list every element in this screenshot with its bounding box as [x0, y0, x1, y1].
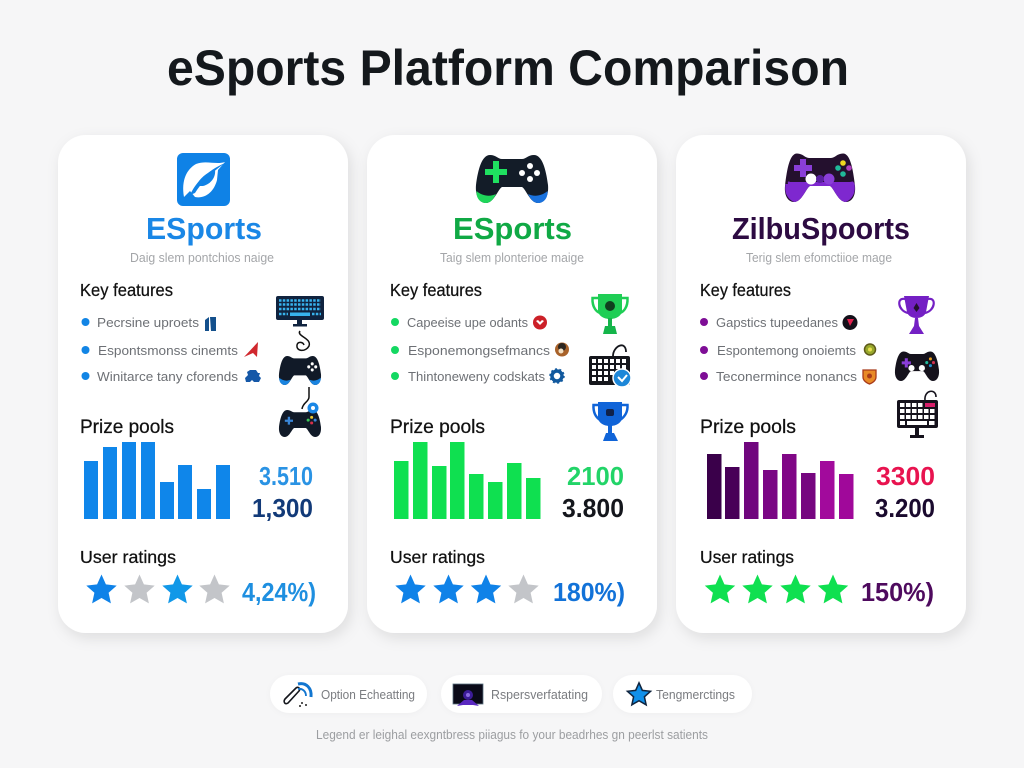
feature list: Thintoneweny codskats	[408, 369, 545, 384]
legend pill: star: Tengmerctings	[656, 687, 735, 702]
star rating	[705, 574, 848, 603]
panel: third platform, purple ZilbuSpoorts	[676, 135, 966, 633]
prize values: 3.510	[259, 461, 313, 491]
icon: keyboard on monitor	[276, 296, 324, 326]
prize values	[252, 461, 313, 523]
icon: second controller with badge	[279, 387, 321, 437]
prize values: 3300	[876, 461, 935, 491]
feature list: Gapstics tupeedanes	[716, 315, 838, 330]
legend pill: option	[270, 675, 427, 713]
bar chart: prize pools	[84, 442, 230, 519]
star rating	[86, 574, 230, 603]
legend pill: monitor	[441, 675, 602, 713]
heading: key features: Key features	[390, 280, 482, 300]
feature list: Capeeise upe odants	[407, 315, 528, 330]
title: eSports Platform Comparison	[167, 40, 849, 96]
rating value: 180%)	[553, 577, 625, 607]
rating value: 4,24%)	[242, 577, 316, 607]
prize values: 1,300	[252, 493, 313, 523]
rating value: 150%)	[861, 577, 934, 607]
icon: dark monitor with badge	[453, 684, 483, 706]
icon: blue swoosh logo	[177, 153, 230, 206]
feature list: Esponemongsefmancs	[408, 343, 551, 358]
bar chart: prize pools	[707, 442, 854, 519]
icon: purple controller logo	[785, 154, 855, 202]
heading: key features: Key features	[80, 280, 173, 300]
bar chart: prize pools	[394, 442, 540, 519]
prize values	[562, 461, 624, 523]
feature list	[700, 315, 876, 384]
tagline: Taig slem plonterioe maige	[440, 251, 584, 265]
icon: pen and signal	[284, 684, 311, 707]
platform name: ZilbuSpoorts	[732, 211, 910, 246]
tagline: Daig slem pontchios naige	[130, 251, 274, 265]
tagline: Terig slem efomctiioe mage	[746, 251, 892, 265]
icon: green controller logo	[476, 155, 548, 203]
heading: user ratings: User ratings	[700, 547, 794, 567]
feature list: Pecrsine uproets	[97, 315, 200, 330]
feature list	[82, 315, 261, 384]
panel: second platform, green ESports	[367, 135, 657, 633]
heading: prize pools: Prize pools	[700, 417, 796, 438]
icon: small controller	[895, 352, 939, 381]
heading: user ratings: User ratings	[390, 547, 485, 567]
icon: purple trophy	[899, 296, 934, 334]
prize values	[875, 461, 935, 523]
icon: keyboard with cable	[897, 391, 938, 438]
icon: blue trophy	[593, 402, 628, 441]
feature list: Espontsmonss cinemts	[98, 343, 239, 358]
heading: prize pools: Prize pools	[80, 417, 174, 438]
icon: blue star	[627, 683, 651, 705]
icon: keyboard with badge	[589, 345, 631, 387]
feature list: Teconermince nonancs	[716, 369, 858, 384]
legend pill: star	[613, 675, 752, 713]
prize values: 3.200	[875, 493, 935, 523]
star rating	[395, 574, 539, 603]
feature list: Winitarce tany cforends	[97, 369, 239, 384]
heading: user ratings: User ratings	[80, 547, 176, 567]
feature list: Espontemong onoiemts	[717, 343, 856, 358]
icon: corded controller	[279, 331, 321, 385]
heading: key features: Key features	[700, 280, 791, 300]
icon: green trophy	[592, 294, 628, 334]
platform name: ESports	[453, 211, 572, 246]
prize values: 2100	[567, 461, 624, 491]
prize values: 3.800	[562, 493, 624, 523]
panel: first platform, blue ESports	[58, 135, 348, 633]
heading: prize pools: Prize pools	[390, 417, 485, 438]
legend note: Legend er leighal eexgntbress piiagus fo your beadrhes gn peerlst satients	[316, 728, 708, 742]
legend pill: option: Option Echeatting	[321, 687, 415, 702]
feature list	[391, 315, 569, 384]
platform name: ESports	[146, 211, 262, 246]
legend pill: monitor: Rspersverfatating	[491, 687, 588, 702]
